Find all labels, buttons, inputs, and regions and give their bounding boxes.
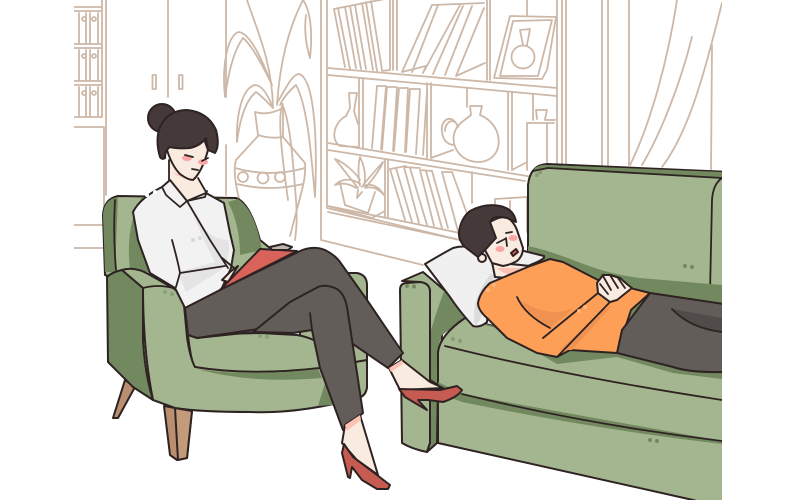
- hair: [459, 205, 516, 257]
- sofa dots: [405, 170, 694, 443]
- sofa seat shadow: [486, 324, 722, 379]
- shelf vases and bottle: [334, 93, 555, 170]
- potted plant in vase: [224, 0, 316, 240]
- lower foot: [342, 415, 378, 475]
- wardrobe doors: [152, 0, 226, 195]
- trousers: far leg: [185, 248, 403, 368]
- bun: [148, 104, 176, 132]
- sofa: [400, 164, 730, 500]
- bookcase frame and shelves: [321, 0, 566, 265]
- neck: [492, 262, 531, 279]
- eyes and mouth: [185, 155, 208, 170]
- middle shelf books: [372, 86, 427, 155]
- blush: [496, 246, 504, 252]
- lower high heel: [342, 444, 390, 489]
- armchair back: [102, 195, 270, 284]
- right foot: [389, 360, 443, 390]
- shirt: [133, 180, 234, 308]
- face: [166, 140, 209, 181]
- armchair side panel: [107, 270, 153, 400]
- armchair right back arm: [300, 273, 367, 403]
- neck: [170, 161, 205, 200]
- sofa left arm inner: [401, 271, 449, 383]
- armchair legs: [113, 380, 192, 460]
- shelf pot plant: [328, 157, 385, 218]
- sweater: [478, 259, 650, 357]
- left binder shelf: [74, 0, 106, 248]
- sweater arm line: [517, 293, 610, 357]
- picture frame: [494, 16, 556, 79]
- clipboard: [220, 249, 297, 290]
- collar: [162, 187, 228, 287]
- sofa back: [527, 163, 722, 285]
- window curtains: [602, 0, 722, 172]
- right high heel: [399, 386, 462, 410]
- sofa back shadow: [528, 246, 722, 319]
- armchair front and arm: [122, 269, 367, 412]
- sofa seat and base: [438, 318, 730, 500]
- woman therapist: [133, 104, 462, 489]
- trousers: [617, 293, 730, 372]
- near leg folds: [310, 313, 312, 330]
- ear: [478, 254, 486, 262]
- top shelf books: [334, 0, 485, 76]
- eyes and mouth: [497, 232, 512, 246]
- face: [485, 217, 523, 266]
- pillow: [425, 246, 544, 326]
- lower shelf books and box: [390, 166, 527, 232]
- hair: [158, 110, 218, 159]
- near leg: [197, 286, 363, 430]
- armchair seat shadow: [198, 369, 333, 406]
- sofa front arm: [400, 282, 430, 452]
- armchair cushion: [188, 333, 314, 371]
- armchair: [103, 196, 367, 460]
- clasped hands: [597, 275, 632, 302]
- blush: [182, 155, 192, 161]
- man on sofa: [425, 205, 730, 372]
- pen and hand: [222, 258, 234, 268]
